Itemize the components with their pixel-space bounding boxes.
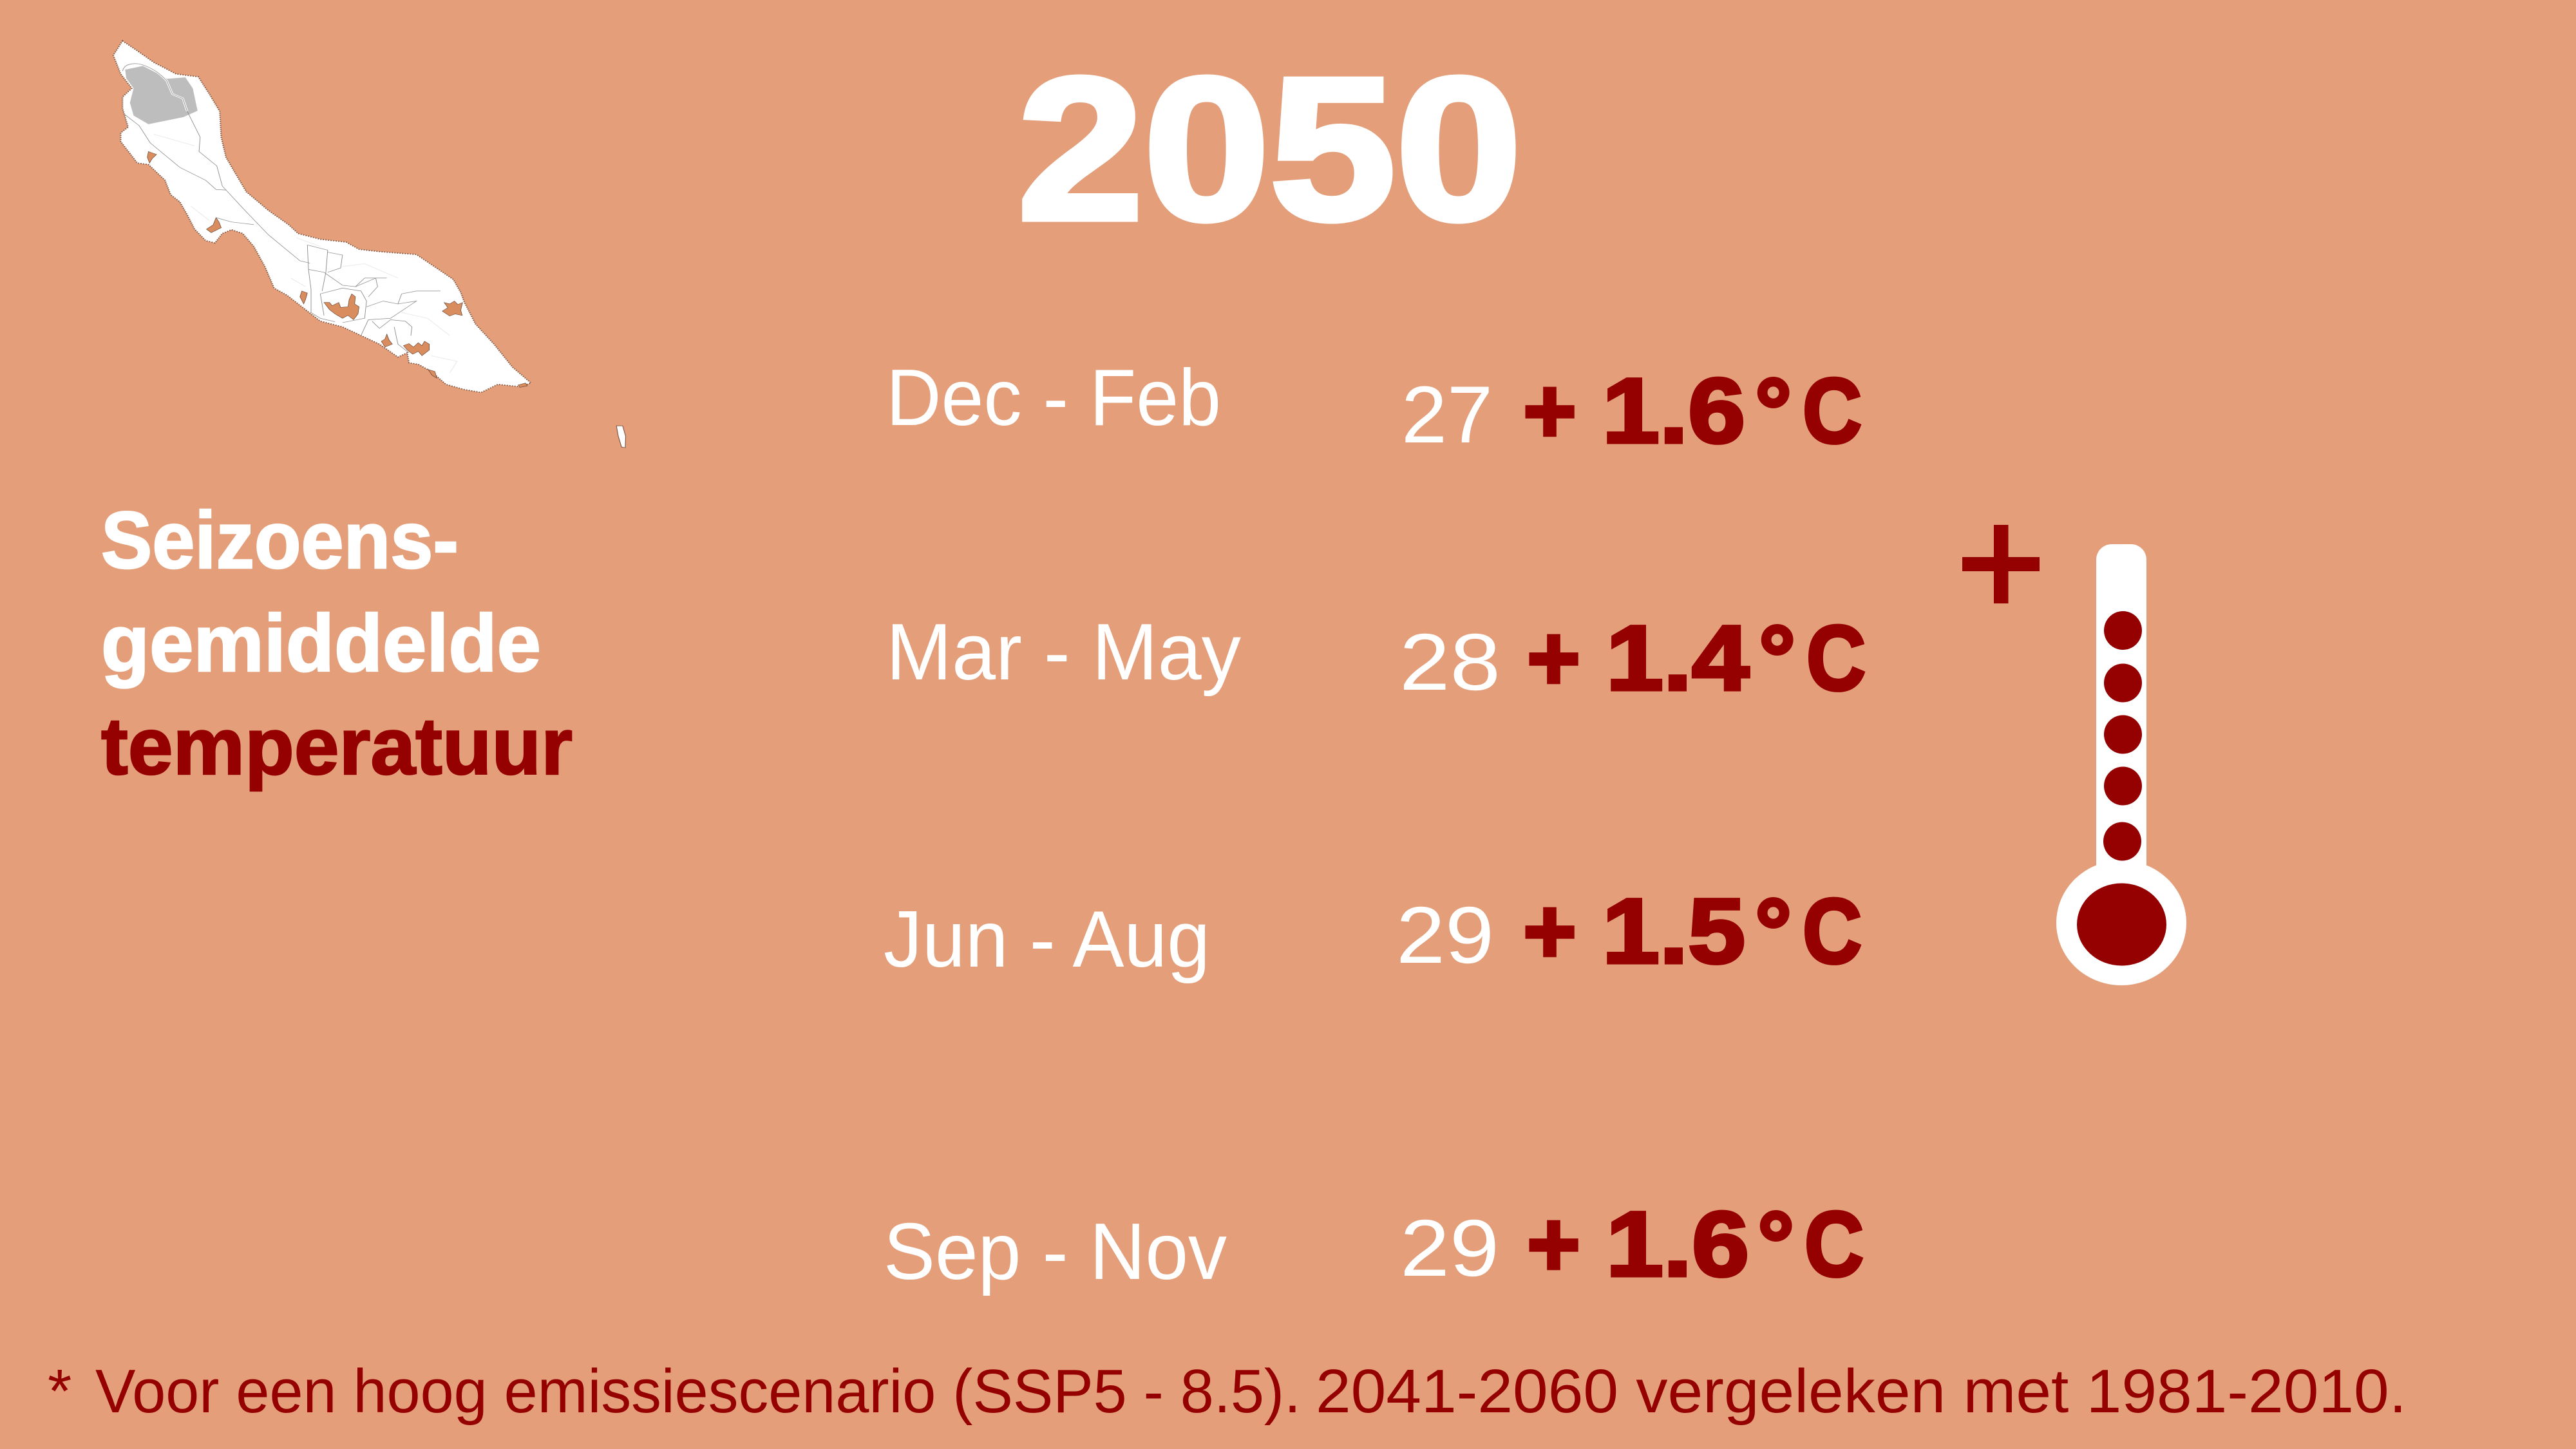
increase value: +: [1523, 880, 1577, 983]
thermometer bulb: [2056, 860, 2186, 985]
increase value: °: [1755, 360, 1792, 462]
heading line 2: gemiddelde: [101, 599, 541, 688]
season label: Dec - Feb: [886, 354, 1221, 442]
island landmass: [113, 41, 531, 392]
footnote scenario text: Voor een hoog emissiescenario (SSP5 - 8.5).: [95, 1357, 1301, 1426]
footnote: [48, 1357, 2407, 1426]
base temperature: 28: [1399, 618, 1501, 707]
icon: thermometer: [2056, 544, 2186, 985]
faint minor streets: [154, 135, 457, 373]
title: 2050: [1018, 35, 1522, 262]
increase value: 1.6: [1602, 360, 1745, 462]
bays and inland water: [147, 151, 527, 387]
base temperature: 29: [1396, 891, 1494, 980]
base temperature: 27: [1401, 370, 1493, 460]
increase value: 1.4: [1606, 607, 1749, 710]
increase value: [1527, 1193, 1864, 1296]
increase value: °: [1757, 1193, 1794, 1296]
increase value: +: [1527, 1193, 1580, 1296]
increase value: [1523, 880, 1862, 983]
heading line 1: Seizoens-: [101, 496, 459, 585]
icon: plus sign: [1962, 525, 2040, 603]
season label: Sep - Nov: [884, 1208, 1227, 1296]
roads: [122, 64, 440, 377]
season label: Mar - May: [886, 608, 1241, 697]
base temperature: 29: [1400, 1204, 1499, 1293]
bulb fill: [2077, 884, 2166, 966]
small islet: [616, 426, 625, 448]
increase value: +: [1527, 607, 1580, 710]
increase value: [1527, 607, 1866, 710]
increase value: +: [1523, 360, 1577, 462]
map: island outline with roads and salt ponds: [113, 41, 625, 448]
road over the park, white casing: [122, 64, 187, 111]
increase value: C: [1804, 1193, 1864, 1296]
row: Mar - May: [886, 607, 1866, 710]
increase value: °: [1759, 607, 1795, 710]
increase value: 1.6: [1606, 1193, 1749, 1296]
footnote asterisk: *: [48, 1357, 71, 1426]
row: Jun - Aug: [884, 880, 1862, 984]
heading line 3: temperatuur: [101, 702, 573, 791]
grey park area: [125, 66, 198, 124]
footnote period text: 2041-2060 vergeleken met 1981-2010.: [1316, 1357, 2407, 1426]
heading: seasonal average temperature: [101, 496, 573, 791]
increase value: [1523, 360, 1862, 462]
increase value: C: [1806, 607, 1866, 710]
scale dots: [2103, 611, 2142, 860]
thermometer tube: [2096, 544, 2146, 879]
increase value: °: [1755, 880, 1792, 983]
row: Sep - Nov: [884, 1193, 1864, 1296]
season label: Jun - Aug: [884, 895, 1210, 984]
row: Dec - Feb: [886, 354, 1862, 462]
increase value: C: [1803, 360, 1862, 462]
increase value: C: [1803, 880, 1862, 983]
increase value: 1.5: [1602, 880, 1745, 983]
